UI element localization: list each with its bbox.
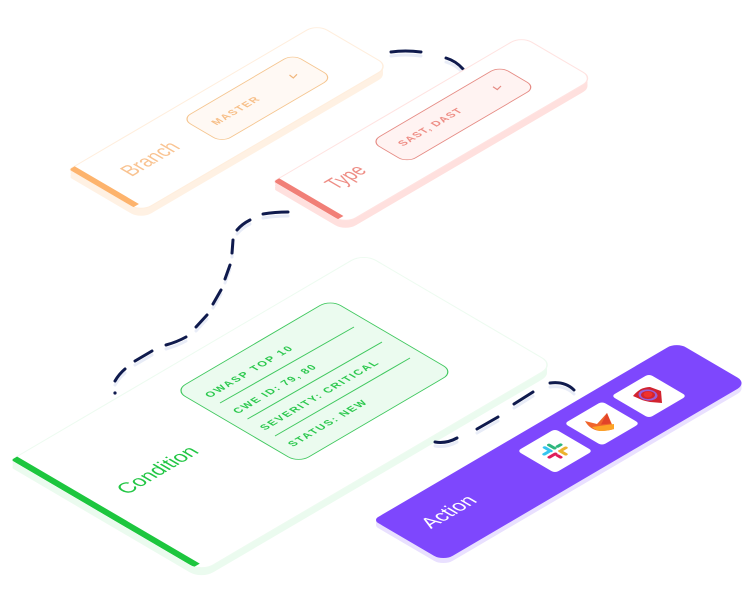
condition: OWASP: OWASP TOP 10 [203, 345, 296, 400]
condition: severity: SEVERITY: CRITICAL [258, 359, 382, 432]
icon: gitlab [564, 401, 640, 446]
action label: Action [415, 492, 483, 532]
panel: condition [6, 253, 559, 579]
condition: status: STATUS: NEW [286, 399, 370, 449]
branch accent bar [69, 166, 139, 207]
icon: slack [517, 429, 593, 473]
type label: Type [319, 161, 372, 193]
branch dropdown [182, 54, 333, 142]
panel: type [269, 36, 598, 231]
connector: type to condition [113, 212, 288, 395]
condition: CWE: CWE ID: 79, 80 [231, 364, 320, 416]
type accent bar [274, 178, 343, 219]
type dropdown: SAST, DAST [396, 107, 466, 148]
icon: shield [611, 374, 687, 418]
condition list box [175, 299, 454, 463]
connector: branch to type [391, 51, 463, 73]
branch label: Branch [114, 138, 186, 180]
panel: action [370, 342, 750, 566]
connector: condition to action [435, 383, 574, 446]
type dropdown [371, 66, 536, 163]
branch dropdown: MASTER [210, 96, 263, 127]
panel: branch [64, 24, 394, 219]
condition accent bar [11, 456, 200, 567]
condition label: Condition [111, 443, 204, 498]
